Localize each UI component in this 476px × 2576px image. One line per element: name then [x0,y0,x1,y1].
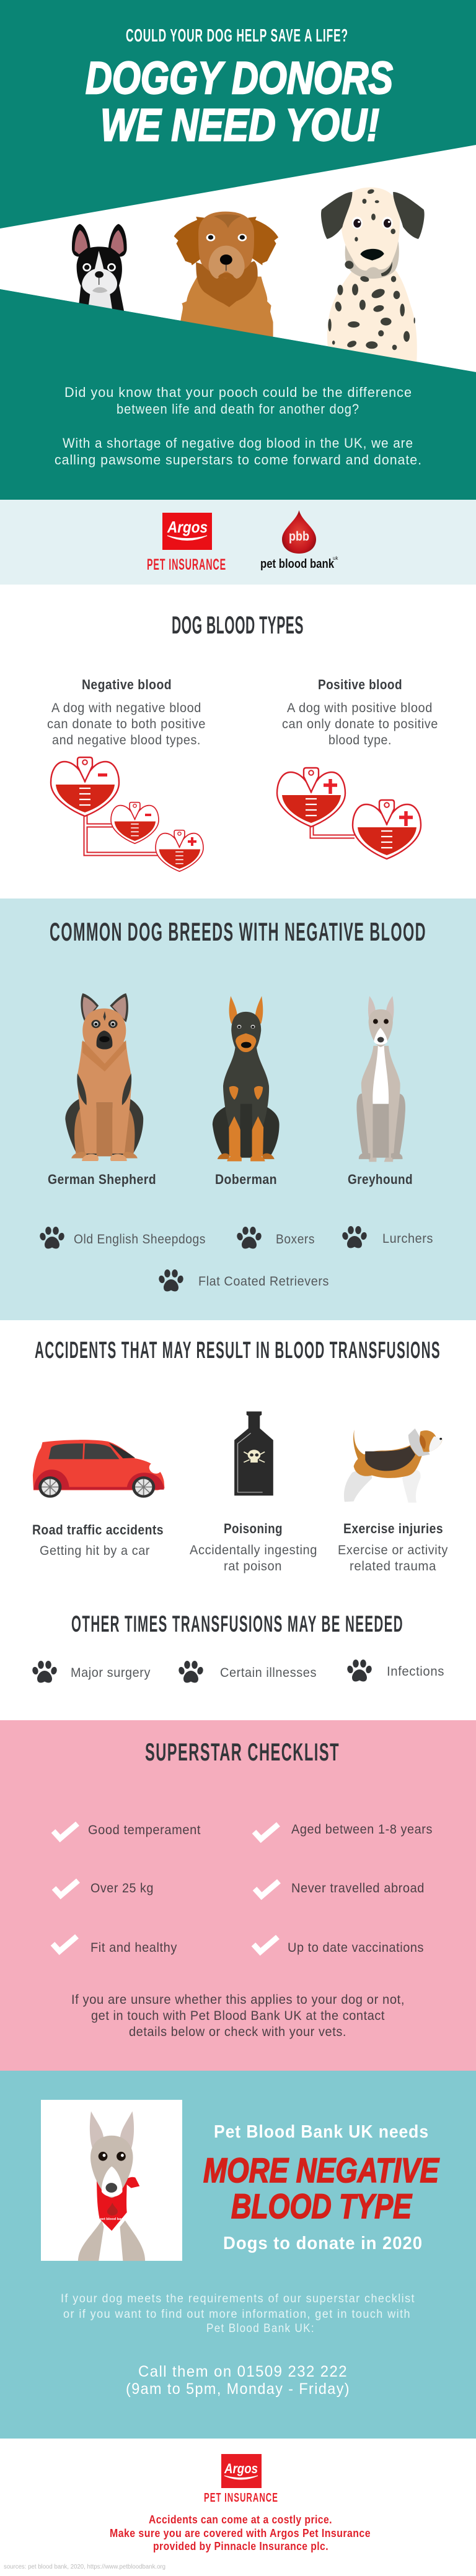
logo: Argos Pet Insurance footer: PET INSURANCE [204,2491,278,2505]
list: old english sheepdogs [39,1227,206,1248]
hero illustration: dalmatian [321,188,425,363]
checklist note [71,1993,405,2039]
panel: call to action [0,2071,476,2439]
breed names [48,1172,413,1187]
item: exercise injuries [338,1521,448,1573]
illustration: doberman [213,996,280,1161]
hero title: WE NEED YOU! [100,100,379,150]
panel: dog blood types [0,585,476,899]
illustration: greyhound [356,996,405,1162]
logo: Argos Pet Insurance: Argos [167,518,208,536]
list: infections [346,1660,444,1681]
hero illustration: golden retriever [174,212,278,341]
cta: phone: Call them on 01509 232 222 [138,2363,348,2380]
icon: negative blood bags [51,757,203,871]
check: over 25 kg [54,1881,154,1895]
check: vaccinations: Up to date vaccinations [288,1941,424,1955]
breed names: Doberman [215,1172,277,1187]
list: flat coated retrievers [158,1269,329,1291]
check: aged [254,1822,433,1839]
column: negative blood: A dog with negative blood [51,701,201,715]
checklist note: details below or check with your vets. [129,2025,346,2039]
item: poisoning: Accidentally ingesting [190,1543,317,1557]
logo: Argos Pet Insurance footer [204,2454,278,2505]
list: certain illnesses: Certain illnesses [220,1666,317,1680]
cta: requirements text: or if you want to find out more information, get in touch with [63,2308,411,2321]
hero paragraph [55,385,422,468]
check: fit and healthy [53,1936,177,1955]
footer message [110,2513,371,2552]
hero paragraph: between life and death for another dog? [117,401,359,417]
item: exercise injuries: Exercise injuries [343,1521,443,1536]
card: dog with bandana [41,2100,182,2261]
white diagonal band [0,145,476,372]
check: never travelled: Never travelled abroad [291,1881,425,1895]
item: road traffic accidents: Getting hit by a car [40,1544,150,1558]
logo: Argos Pet Insurance [147,513,226,573]
cta: needs: Pet Blood Bank UK needs [214,2122,429,2142]
hero paragraph: Did you know that your pooch could be the difference [64,385,412,400]
column: positive blood: Positive blood [318,677,402,692]
cta: requirements text: If your dog meets the requirements of our superstar checklist [61,2292,415,2305]
icon: poison bottle [234,1411,273,1495]
logo: pet blood bank: pet blood bank [260,557,335,571]
cta: more negative blood type [203,2151,439,2226]
heading: superstar checklist: SUPERSTAR CHECKLIST [145,1739,340,1766]
panel: footer [0,2439,476,2576]
list: lurchers: Lurchers [382,1232,433,1246]
hero title [86,53,393,150]
column: positive blood: A dog with positive blood [287,701,433,715]
list: boxers: Boxers [276,1232,315,1247]
check: over 25 kg: Over 25 kg [90,1881,154,1895]
sources: sources: pet blood bank, 2020, https://www.petbloodbank.org [4,2564,165,2570]
list: major surgery: Major surgery [71,1666,151,1680]
cta: requirements text [61,2292,415,2335]
logo: pet blood bank: pbb [289,529,309,544]
item: road traffic accidents: Road traffic accidents [32,1522,164,1538]
list: certain illnesses [178,1661,317,1682]
check: fit and healthy: Fit and healthy [90,1941,177,1955]
footer message: provided by Pinnacle Insurance plc. [153,2540,328,2552]
column: positive blood [282,677,438,747]
panel: hero [0,0,476,500]
column: negative blood [47,677,206,747]
panel: logo strip [0,500,476,585]
heading: dog blood types: DOG BLOOD TYPES [172,612,304,639]
check: good temperament: Good temperament [88,1823,201,1837]
item: exercise injuries: related trauma [350,1559,436,1573]
column: negative blood: Negative blood [82,677,172,692]
logo: pet blood bank [260,510,338,571]
column: negative blood: can donate to both positive [47,717,206,731]
checklist note: If you are unsure whether this applies to your dog or not, [71,1993,405,2007]
logo: Argos Pet Insurance footer: Argos [224,2461,258,2476]
lower teal diagonal [0,289,476,500]
cta: dogs to donate: Dogs to donate in 2020 [223,2234,423,2253]
card: dog with bandana: pet blood bank [100,2217,126,2221]
list: boxers [236,1227,315,1248]
cta: requirements text: Pet Blood Bank UK: [206,2322,315,2335]
checklist note: get in touch with Pet Blood Bank UK at the contact [91,2009,385,2023]
item: road traffic accidents [32,1522,164,1558]
column: positive blood: blood type. [328,733,392,747]
cta: phone [126,2363,350,2398]
hero paragraph: calling pawsome superstars to come forward and donate. [55,452,422,468]
cta: more negative blood type: BLOOD TYPE [231,2187,412,2226]
panel: common breeds [0,899,476,1320]
illustration: german shepherd [65,993,143,1161]
list: major surgery [32,1661,151,1682]
item: poisoning: rat poison [224,1559,282,1573]
column: negative blood: and negative blood types. [52,733,201,747]
breed names: Greyhound [348,1172,413,1187]
check: vaccinations [253,1937,424,1955]
cta: phone: (9am to 5pm, Monday - Friday) [126,2380,350,2398]
check: good temperament [53,1823,201,1838]
item: exercise injuries: Exercise or activity [338,1543,448,1557]
list: lurchers [342,1226,433,1248]
list: infections: Infections [387,1664,444,1679]
panel: superstar checklist [0,1720,476,2071]
check: aged: Aged between 1-8 years [291,1822,433,1837]
column: positive blood: can only donate to positive [282,717,438,731]
logo: Argos Pet Insurance: PET INSURANCE [147,556,226,573]
list: flat coated retrievers: Flat Coated Retrievers [198,1274,329,1289]
item: poisoning [190,1521,317,1573]
item: poisoning: Poisoning [224,1521,283,1536]
panel: accidents [0,1320,476,1720]
footer message: Accidents can come at a costly price. [149,2513,332,2526]
breed names: German Shepherd [48,1172,156,1187]
icon: positive blood bags [277,768,421,859]
hero illustration: boston terrier [72,224,127,311]
list: old english sheepdogs: Old English Sheepdogs [74,1232,206,1247]
icon: red car [33,1440,164,1498]
logo: pet blood bank: uk [333,555,338,561]
icon: beagle with cone [344,1429,443,1503]
hero paragraph: With a shortage of negative dog blood in the UK, we are [63,435,413,451]
hero title: DOGGY DONORS [86,53,393,103]
footer message: Make sure you are covered with Argos Pet Insurance [110,2527,371,2539]
